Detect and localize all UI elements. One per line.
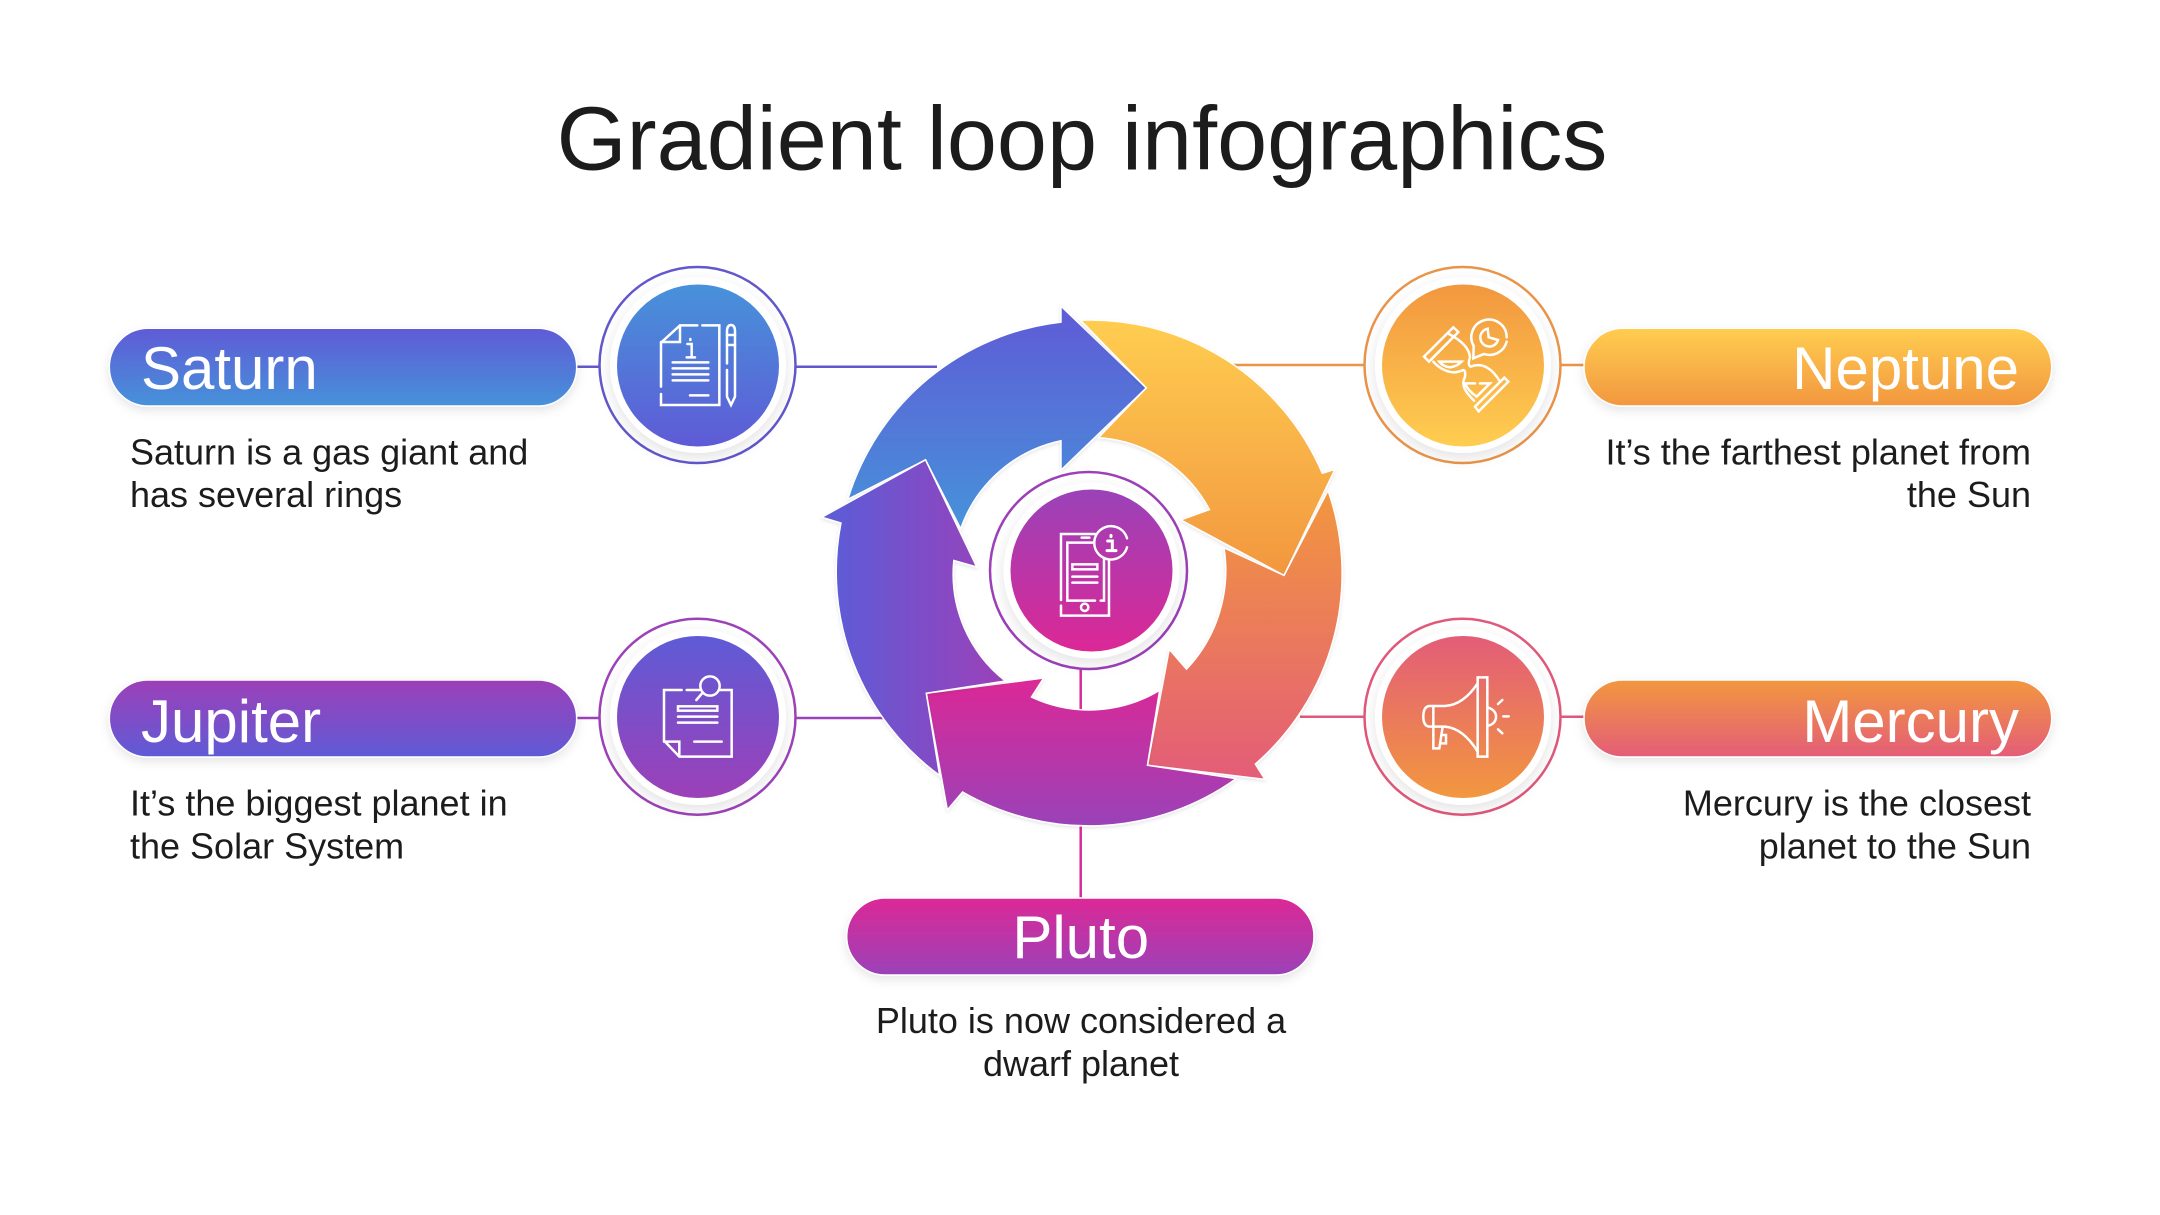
- arrow: magenta: [926, 678, 1236, 826]
- pill: Jupiter: [109, 680, 577, 757]
- title: Gradient loop infographics: [557, 90, 1607, 190]
- pill: Pluto: [847, 898, 1314, 975]
- connector: Mercury: [1300, 715, 1586, 718]
- pill: Jupiter: Jupiter: [141, 688, 321, 755]
- icon: phone with info: [1061, 526, 1127, 616]
- connector: Pluto: [1079, 665, 1082, 900]
- icon: megaphone: [1423, 677, 1509, 757]
- text: Mercury description: planet to the Sun: [1759, 826, 2031, 867]
- pill: Neptune: [1584, 328, 2052, 406]
- text: Mercury description: Mercury is the closest: [1683, 782, 2031, 823]
- text: Jupiter description: the Solar System: [130, 826, 404, 867]
- connector: Jupiter: [576, 717, 890, 719]
- text: Pluto description: dwarf planet: [983, 1043, 1179, 1084]
- icon: note with magnifier: [664, 676, 732, 757]
- arrow: yellow: [1080, 320, 1335, 575]
- arrow: orange: [1147, 490, 1342, 779]
- text: Saturn description: Saturn is a gas giant and: [130, 432, 528, 472]
- connector: Neptune: [1232, 364, 1586, 366]
- text: Saturn description: has several rings: [130, 474, 402, 515]
- pill: Mercury: Mercury: [1802, 688, 2019, 755]
- text: Pluto description: Pluto is now considered a: [876, 1000, 1287, 1041]
- text: Neptune description: the Sun: [1907, 474, 2031, 515]
- connector: Saturn: [576, 365, 937, 368]
- icon: document and pen: [661, 325, 735, 405]
- icon: hourglass and chart bubble: [1424, 320, 1508, 411]
- text: Neptune description: It’s the farthest planet from: [1605, 432, 2031, 472]
- pill: Mercury: [1584, 680, 2052, 757]
- loop arrows: [822, 306, 1342, 826]
- pill: Saturn: Saturn: [141, 335, 318, 402]
- pill: Saturn: [109, 328, 577, 406]
- pill: Pluto: Pluto: [1012, 904, 1149, 971]
- text: Jupiter description: It’s the biggest planet in: [130, 782, 508, 823]
- arrow: blue: [848, 306, 1146, 529]
- center circle: [990, 472, 1187, 669]
- node: Mercury circle: [1364, 619, 1560, 815]
- node: Neptune circle: [1364, 267, 1560, 463]
- arrow: purple: [822, 460, 1005, 776]
- node: Saturn circle: [600, 267, 796, 463]
- node: Jupiter circle: [600, 619, 796, 815]
- pill: Neptune: Neptune: [1792, 335, 2019, 402]
